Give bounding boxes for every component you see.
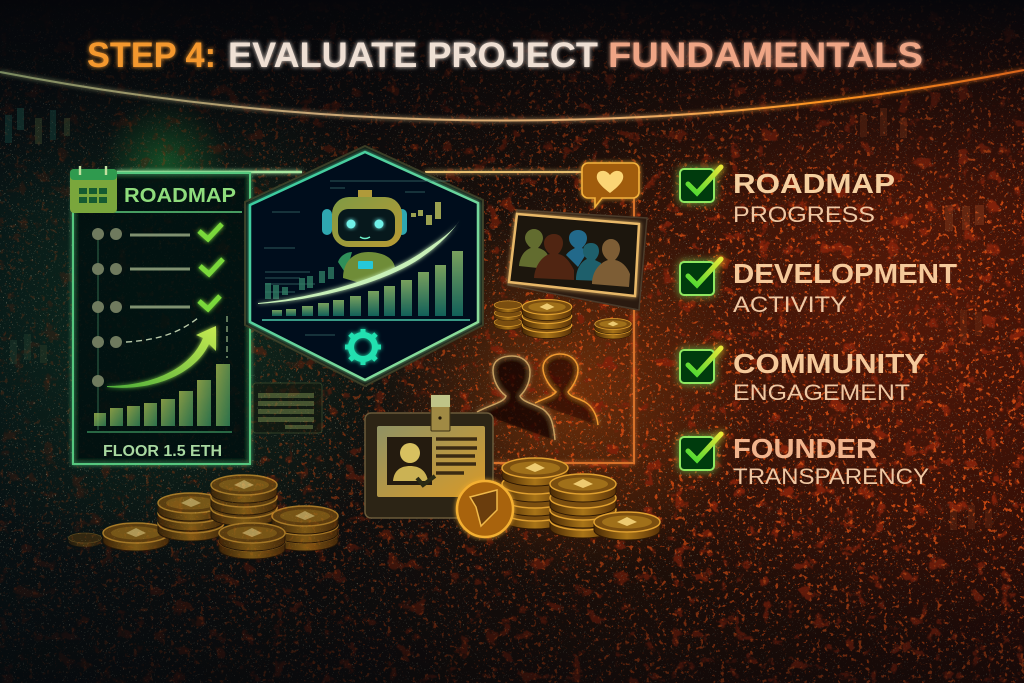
panel: hexagon robot analytics (245, 146, 483, 386)
item: founder transparency: TRANSPARENCY (733, 464, 929, 489)
item: roadmap progress: PROGRESS (733, 202, 875, 227)
community avatars (519, 229, 630, 287)
item: community engagement: ENGAGEMENT (733, 380, 910, 405)
icon: heart speech bubble (582, 163, 639, 207)
connector line: roadmap to community frame (117, 172, 634, 463)
icon: founder silhouettes (477, 354, 598, 440)
item: development activity (680, 258, 957, 317)
coin stacks: lower right (502, 458, 660, 540)
icon: check box (680, 348, 721, 383)
panel heading: roadmap: ROADMAP (124, 185, 236, 207)
panel: community monitor (508, 210, 647, 310)
item: community engagement: COMMUNITY (733, 348, 925, 379)
curved divider line (0, 70, 1024, 121)
bar chart: left cluster (265, 267, 334, 299)
icon: gear (345, 329, 381, 365)
icon: keyboard (253, 383, 322, 433)
item: roadmap progress (680, 167, 895, 227)
coin stacks: lower left (68, 475, 338, 559)
title (87, 36, 923, 75)
founder photo (387, 437, 432, 485)
item: roadmap progress: ROADMAP (733, 168, 895, 199)
coin stacks: upper (494, 300, 631, 339)
panel: roadmap (70, 166, 250, 464)
icon: check box (680, 434, 721, 470)
item: community engagement (680, 348, 925, 405)
item: development activity: ACTIVITY (733, 292, 847, 317)
icon: check box (680, 259, 721, 295)
panel: founder ID card (365, 395, 493, 518)
icon: check box (680, 167, 721, 202)
roadmap milestones (92, 224, 227, 430)
label: floor price: FLOOR 1.5 ETH (103, 443, 222, 460)
ID clip (431, 395, 450, 431)
small candles (411, 202, 441, 225)
icon: token coin (457, 481, 513, 537)
checklist (680, 167, 957, 489)
item: founder transparency: FOUNDER (733, 433, 877, 464)
curve swoosh (258, 220, 460, 304)
faint background candlesticks (5, 108, 992, 530)
title: FUNDAMENTALS (608, 36, 923, 75)
item: development activity: DEVELOPMENT (733, 258, 957, 289)
icon: calendar (70, 166, 117, 213)
arrow: rising trend (107, 326, 216, 388)
item: founder transparency (680, 433, 929, 489)
decorative data lines (264, 181, 450, 335)
icon: robot (322, 190, 407, 283)
title: STEP 4: (87, 36, 216, 75)
bar chart: roadmap (94, 364, 230, 426)
title: EVALUATE PROJECT (228, 36, 598, 75)
bar chart: hexagon (272, 251, 463, 316)
